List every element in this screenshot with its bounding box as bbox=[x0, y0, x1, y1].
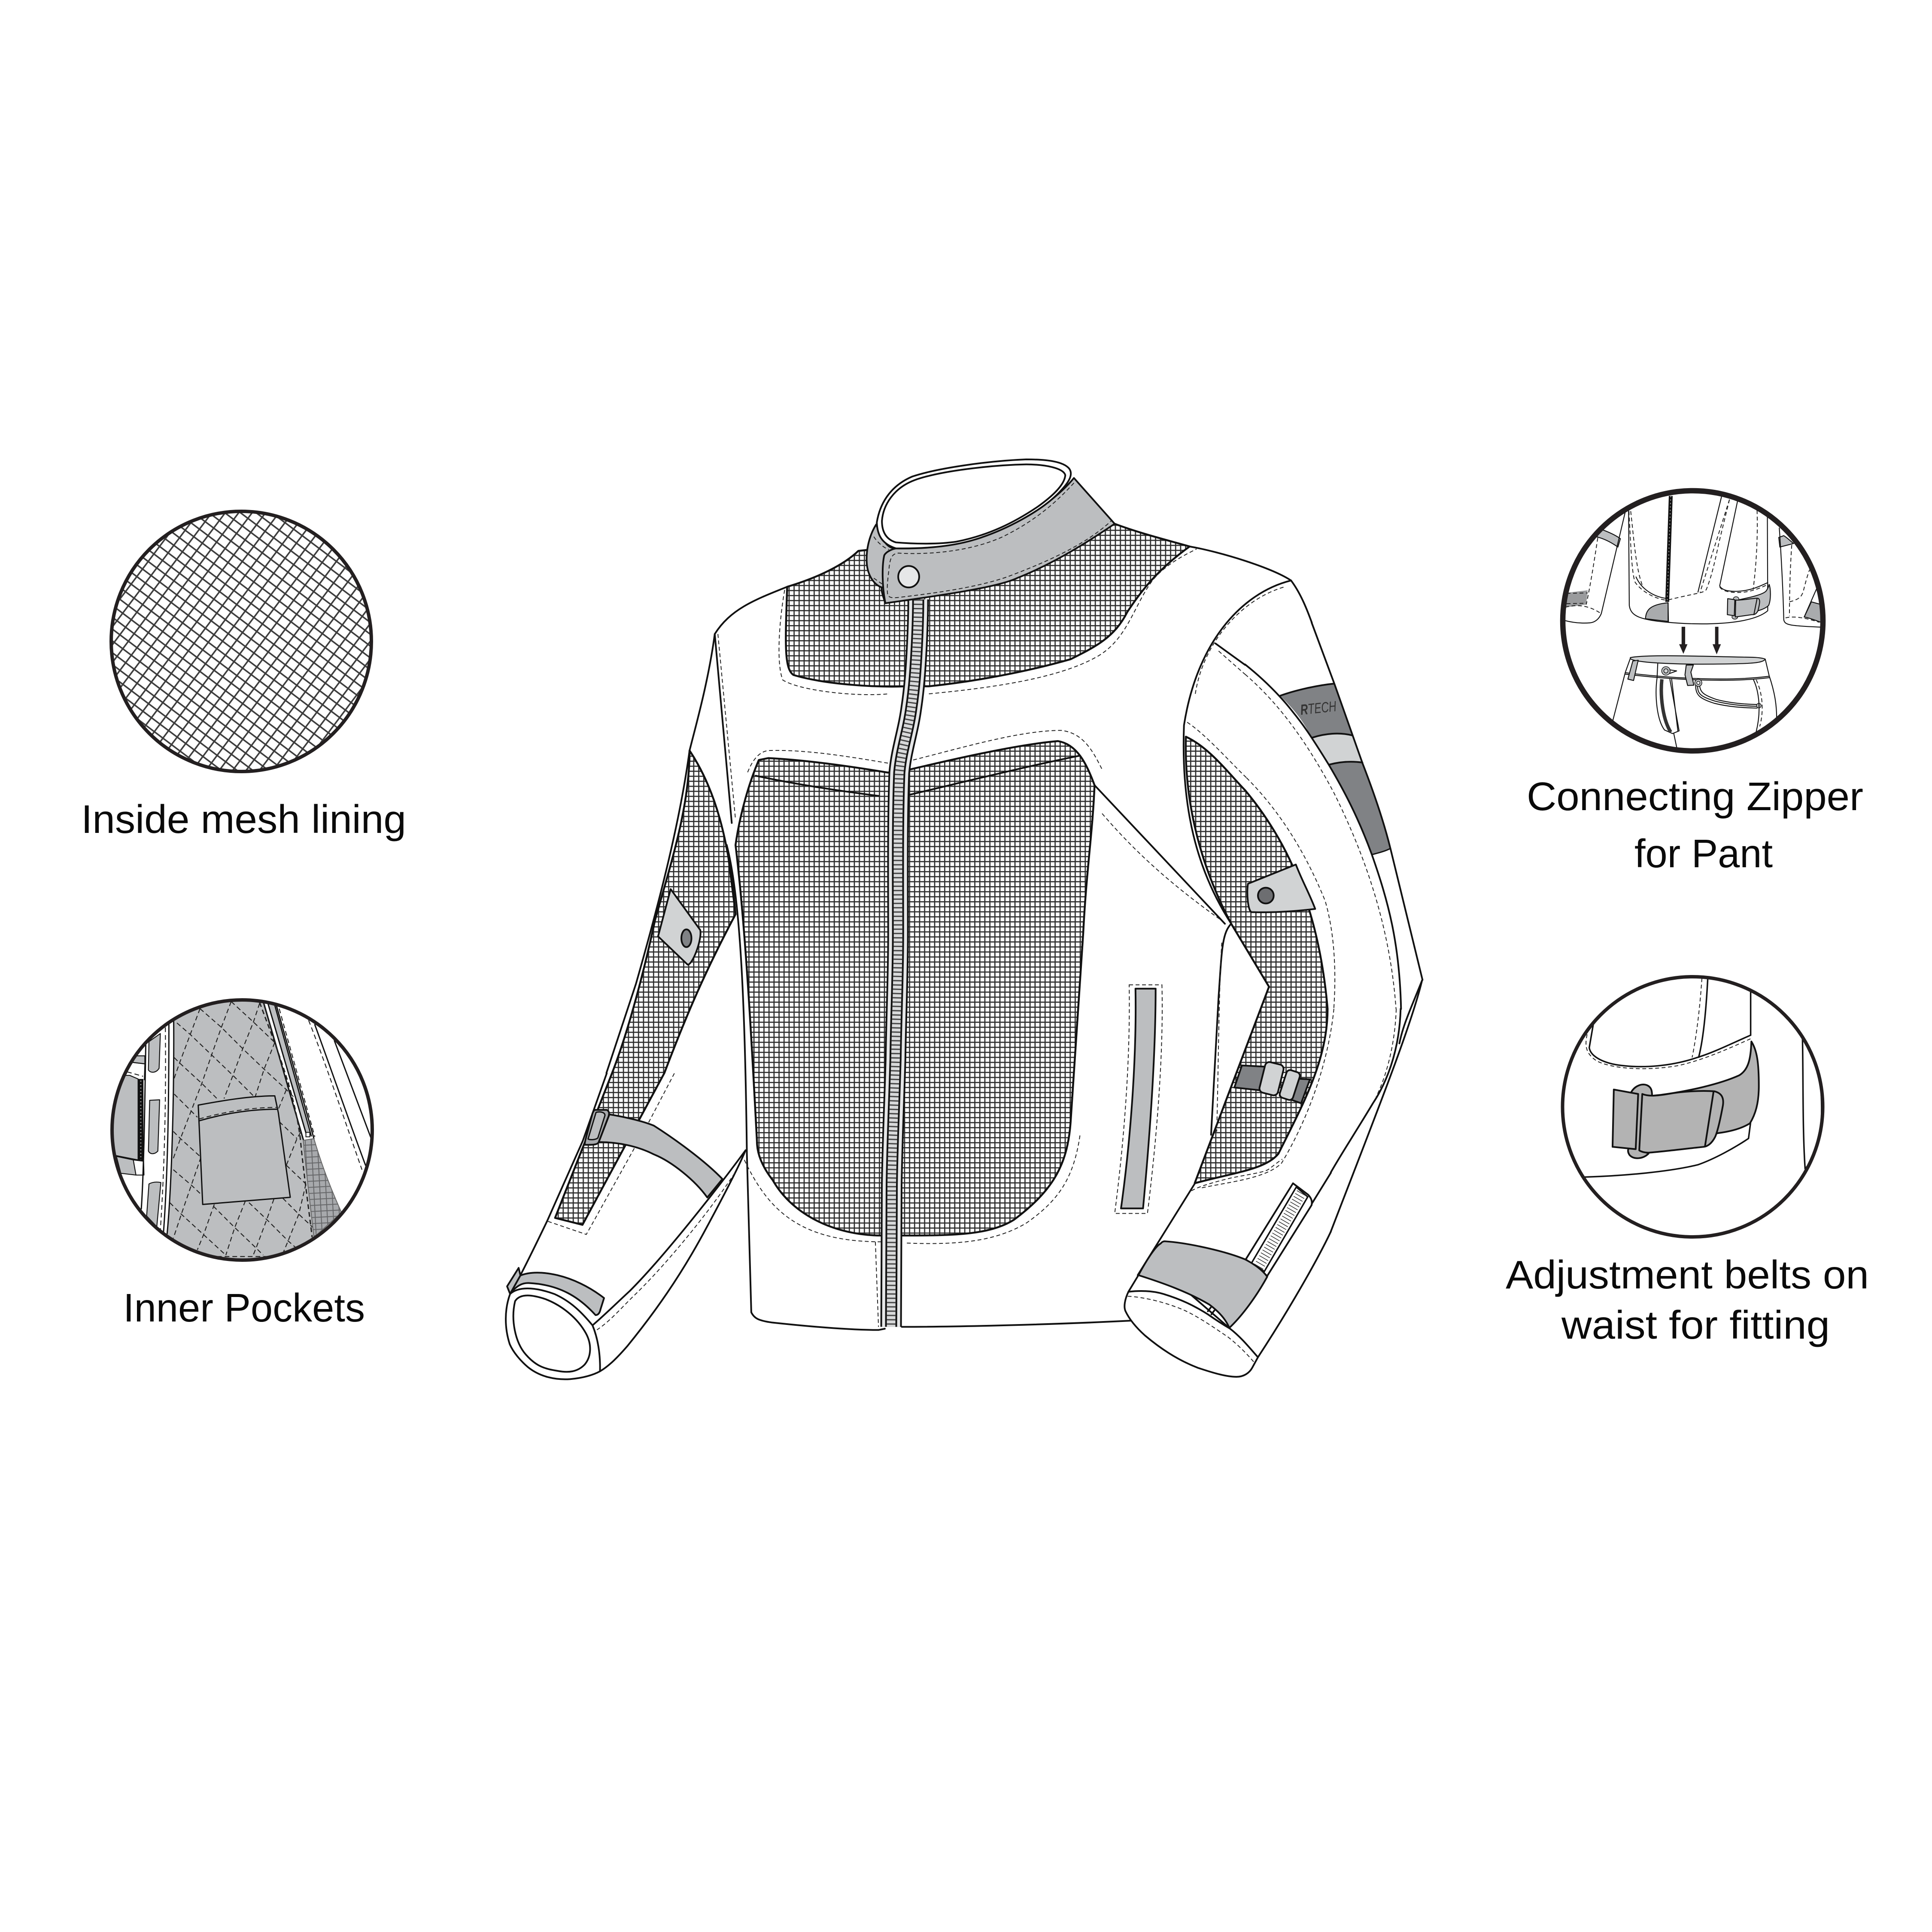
label: connecting zipper for pant bbox=[1527, 774, 1863, 876]
pocket bbox=[198, 1096, 290, 1204]
left gray block with zipper bbox=[106, 1056, 145, 1175]
chest pocket zipper flap bbox=[1121, 989, 1156, 1209]
upper chest mesh panel bbox=[786, 524, 1190, 687]
left sleeve tab with snap bbox=[658, 889, 701, 965]
mesh wedge bbox=[303, 1139, 341, 1237]
detail: inside mesh lining bbox=[81, 511, 406, 841]
stitching lines bbox=[718, 549, 1396, 1327]
outer tab bbox=[1613, 1090, 1638, 1149]
label: inner pockets: Inner Pockets bbox=[123, 1285, 365, 1330]
connecting zipper circle bbox=[1563, 491, 1823, 751]
seam bands bbox=[141, 1021, 174, 1234]
collar snap button bbox=[898, 566, 919, 587]
infographic canvas bbox=[85, 459, 1866, 1380]
brand label: RTECH bbox=[1300, 698, 1337, 718]
label: adjustment belts on waist for fitting: waist for fitting bbox=[1561, 1303, 1830, 1347]
down arrows bbox=[1679, 627, 1721, 654]
cuff band bbox=[507, 1268, 604, 1315]
detail: adjustment belts bbox=[1506, 977, 1869, 1347]
zipper bands at right bbox=[260, 1002, 315, 1237]
left forearm strap and cuff bbox=[506, 1073, 746, 1379]
torso mesh panel bbox=[735, 741, 1094, 1236]
right sleeve tab with snap bbox=[1247, 865, 1315, 912]
gray band bbox=[1652, 1042, 1759, 1148]
right forearm vent and cuff bbox=[1124, 1159, 1331, 1377]
label: inside mesh lining: Inside mesh lining bbox=[81, 797, 406, 841]
pant waistband bbox=[1613, 656, 1777, 749]
right sleeve fragment bbox=[1779, 528, 1821, 627]
label: adjustment belts on waist for fitting: Adjustment belts on bbox=[1506, 1252, 1869, 1297]
cuff opening bbox=[506, 1288, 600, 1379]
collar bbox=[867, 459, 1115, 603]
forearm zipper vent bbox=[1246, 1183, 1312, 1276]
label: connecting zipper for pant: Connecting Zipper bbox=[1527, 774, 1863, 819]
belt scene bbox=[1584, 978, 1822, 1177]
right stitched seams bbox=[309, 1020, 371, 1170]
label: connecting zipper for pant: for Pant bbox=[1634, 831, 1773, 876]
mesh lining circle bbox=[111, 511, 371, 772]
left sleeve strap bbox=[599, 1115, 723, 1197]
cuff end bbox=[1124, 1275, 1258, 1377]
gray tabs bbox=[147, 1033, 161, 1227]
right sleeve mesh panel bbox=[1186, 737, 1327, 1183]
adjustment belt circle bbox=[1563, 977, 1823, 1237]
inner pocket circle bbox=[106, 997, 372, 1270]
strap buckle bbox=[584, 1110, 609, 1145]
waist strap bbox=[1727, 584, 1771, 619]
jacket body bbox=[555, 524, 1422, 1330]
main jacket illustration bbox=[506, 459, 1422, 1379]
right side waist strap and buckles bbox=[1234, 1061, 1310, 1103]
jacket hem bbox=[1628, 496, 1768, 624]
center front zipper bbox=[891, 599, 918, 1327]
left sleeve mesh panel bbox=[555, 750, 735, 1225]
jacket and pant scene bbox=[1565, 496, 1821, 749]
left sleeve fragment bbox=[1565, 513, 1625, 623]
cuff band bbox=[1139, 1241, 1267, 1328]
label: adjustment belts on waist for fitting bbox=[1506, 1252, 1869, 1347]
quilted diamond stitching bbox=[170, 1002, 314, 1257]
belt loop bbox=[1628, 1084, 1652, 1158]
jacket outline seams bbox=[606, 547, 1422, 1330]
detail: inner pockets bbox=[106, 997, 372, 1330]
pocket scene bbox=[106, 997, 371, 1270]
right sleeve upper with badge bbox=[1245, 623, 1422, 1009]
detail: connecting zipper bbox=[1527, 491, 1863, 876]
